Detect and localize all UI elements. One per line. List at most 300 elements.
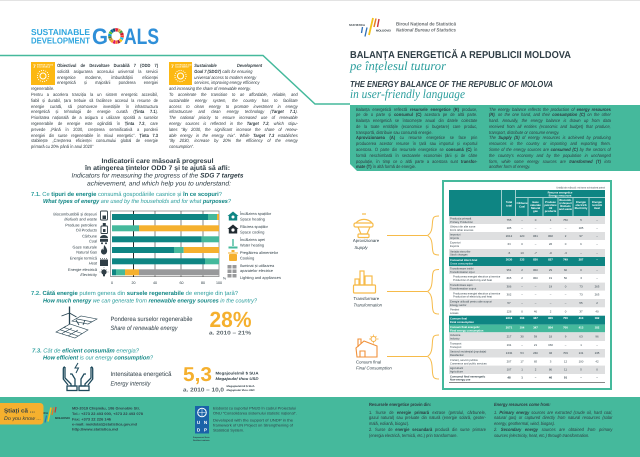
text block: SDG 7 English <box>169 63 298 149</box>
logo: UNDP: N <box>204 420 208 425</box>
chart row labels: Energie electrică <box>68 267 98 272</box>
table values: 1346 <box>506 351 513 355</box>
table values: 28 <box>549 242 552 246</box>
table values: 100 <box>579 360 584 364</box>
table row labels: Losses <box>450 312 459 315</box>
table values: 3 <box>580 276 582 280</box>
table row labels: Transport <box>450 342 462 346</box>
table values: 19 <box>549 284 552 288</box>
text block: SDG 7 English: “By 2030, increase by 20% the efficiency of the energy <box>169 138 298 143</box>
logo: UNDP: D <box>197 428 201 432</box>
chart row labels: Oil Products <box>76 228 97 232</box>
table header: Energy resources <box>549 195 572 198</box>
title: Romanian <box>349 49 571 73</box>
table values: 0 <box>565 284 567 288</box>
stat: renewable share: Ponderea surselor regenerabile <box>110 316 193 323</box>
bar: heat <box>112 258 219 264</box>
chart row labels: Electricity <box>80 272 98 277</box>
text block: energy balance English: the country's economy and by the population in unchanged <box>489 153 611 158</box>
legend: Lighting and appliances <box>240 275 281 280</box>
table values: 830 <box>533 258 538 262</box>
table header: Heat <box>594 207 600 210</box>
text block: energy balance English: Some of the energy sources are consumed (C) by the sectors of <box>489 147 611 152</box>
heading: question 7.3 <box>32 348 154 362</box>
table values: 265 <box>595 292 600 296</box>
heading: indicators: în atingerea țintelor ODD 7 și te ajută să afli: <box>84 165 230 172</box>
table values: 230 <box>533 351 538 355</box>
legend: Răcirea spațiilor <box>240 224 269 229</box>
chart row icons <box>100 211 108 276</box>
table values: – <box>550 226 552 230</box>
table values: 48 <box>507 376 511 380</box>
label: final consumption: Consum final <box>356 360 381 364</box>
title: English <box>350 79 553 101</box>
label: transformation: Transformation <box>354 302 383 308</box>
table values: 804 <box>548 326 553 330</box>
table values: 34 <box>507 242 511 246</box>
table header: naturale <box>530 204 541 207</box>
table values: – <box>596 234 598 238</box>
text block: energy balance English: (R), on the one hand, and their consumption (C) on the other <box>489 112 611 117</box>
label: supply: Aprovizionare <box>353 238 380 243</box>
icon: SDG 7 badge Romanian: 7 <box>33 64 36 70</box>
table values: 158 <box>548 343 553 347</box>
table values: – <box>550 301 552 305</box>
label: final consumption <box>356 360 392 370</box>
text block: SDG 7 Romanian: solicită asigurarea accesului universal la servicii <box>57 69 158 74</box>
table values: 42 <box>595 360 599 364</box>
table header: Biocomb. <box>559 199 572 202</box>
icon: supply tank <box>354 214 373 238</box>
table row labels: Exporturi <box>450 242 461 244</box>
label: transformation <box>354 296 383 308</box>
table values: 2 <box>521 268 523 272</box>
table values: 133 <box>520 258 525 262</box>
text block: SDG 7 English: infrastructure and clean energy technology (Target 7.1). <box>169 109 298 114</box>
text block: SDG 7 English: energy sources is reflected in the Target 7.2, which stipu- <box>169 121 298 126</box>
table header: Coal <box>519 206 525 208</box>
logo: UNDP: Empowered lives. <box>193 436 210 439</box>
table values: 700 <box>563 316 568 320</box>
support note: Statistical System. <box>213 428 244 432</box>
table values: 0 <box>535 218 537 222</box>
text block: energy source list Romanian: (energia electrică, termică, etc.) prin transformare. <box>369 433 458 438</box>
table row labels: Sectorul rezidențial (populație) <box>450 350 486 354</box>
stat: renewable share <box>110 307 252 336</box>
text block: SDG 7 English: The national priority to ensure increased use of renewable <box>169 115 298 120</box>
table row labels: Importuri <box>450 234 461 236</box>
text block: SDG 7 English: universal access to modern energy <box>194 75 256 80</box>
text block: energy balance Romanian: Aprovizionarea (A) cu resurse energetice se face prin <box>356 135 477 140</box>
legend: Încălzirea spațiilor <box>239 211 272 216</box>
table values: 755 <box>507 218 512 222</box>
table values: – <box>596 268 598 272</box>
text block: SDG 7 Romanian: fiabil și durabil, țara trebuie să faciliteze accesul la resurse de <box>31 98 158 103</box>
text block: SDG 7 English: services, improving energy efficiency <box>194 80 260 85</box>
text block: SDG 7 English: Sustainable Development <box>194 63 262 68</box>
support note: Developed with the support of UNDP in the <box>213 418 293 422</box>
logo: Statistica Moldovei header <box>349 18 391 36</box>
chart row labels: Gaze naturale <box>73 244 97 250</box>
heading: question 7.1: What types of energy are used by the households and for what purposes? <box>43 198 232 205</box>
stat: energy intensity: Energy intensity <box>110 380 151 388</box>
table values: 287 <box>579 258 584 262</box>
table values: – <box>535 376 537 380</box>
logo: Statistica Moldovei header: STATISTICA <box>349 23 365 27</box>
table row labels: Energy sector <box>450 304 467 307</box>
label: final consumption: Final Consumption <box>356 366 392 370</box>
heading: question 7.2: How much energy we can generate from renewable energy sources in the country? <box>43 298 258 304</box>
table values: 2 <box>565 234 567 238</box>
table header: Energie <box>592 201 602 204</box>
table row labels: Variația stocurilor <box>450 250 471 253</box>
logo: Statistica Moldovei footer <box>32 407 70 422</box>
title: Romanian: pe înțelesul tuturor <box>349 59 446 73</box>
legend: Încălzirea apei <box>239 237 265 242</box>
table values: 860 <box>533 276 538 280</box>
table values: 0 <box>596 368 598 372</box>
icon: heat radiator <box>100 258 108 266</box>
table values: 2 <box>521 276 523 280</box>
table values: 3 <box>550 360 552 364</box>
table values: 0 <box>565 310 567 314</box>
table row labels: Consumul intern brut <box>450 259 477 262</box>
panel: energy balance table: Unități de măsură: mii tone echivalent petrol <box>556 186 605 190</box>
table row labels: Non-energy use <box>450 379 471 382</box>
text block: SDG 7 English: and increasing the share of renewable energy. <box>169 86 251 91</box>
chart row labels: Natural Gas <box>76 250 97 254</box>
icon: wind turbine and solar panels <box>56 306 97 338</box>
table row labels: Final consumption <box>450 321 474 324</box>
table values: – <box>535 284 537 288</box>
stat: energy intensity: 5,3 <box>183 364 212 386</box>
table row labels: Consum final energetic <box>450 326 480 329</box>
icon: SDG 7 badge English: CLEAN ENERGY <box>175 66 190 69</box>
text block: energy balance Romanian: producerea acestor resurse în țară sau importul și exportul <box>356 141 477 146</box>
bar: electricity <box>112 269 219 275</box>
chart row labels <box>53 212 98 277</box>
axis labels <box>111 276 227 285</box>
text block: SDG 7 English: To accelerate the transition to an affordable, reliable, and <box>169 92 298 97</box>
table header: Natural <box>531 207 540 210</box>
table values <box>506 218 600 380</box>
text block: energy source list Romanian: 1. Surse de energie primară extrase (petrolul, cărbunele, <box>369 410 486 415</box>
connector: transformation <box>387 270 439 314</box>
icon: transformation plant <box>354 271 376 293</box>
table values: 91 <box>564 376 567 380</box>
table header: electrică <box>576 204 587 207</box>
icon: SDG 7 badge Romanian: ENERGIE CURATĂ <box>37 64 54 66</box>
legend: Pregătirea alimentelor <box>240 250 279 255</box>
chart row labels: Energie termică <box>70 256 98 260</box>
legend: Cooking <box>240 256 254 260</box>
heading: indicators: Indicators for measuring the progress of the SDG 7 targets <box>72 172 244 180</box>
table values: – <box>535 301 537 305</box>
logo: Sustainable Development Goals: ALS <box>124 24 159 49</box>
contact block: Fax: +373 22 226 146 <box>72 418 111 422</box>
table values: 868 <box>548 234 553 238</box>
table values: 13 <box>520 251 524 255</box>
table values: – <box>565 226 567 230</box>
text block: SDG 7 English: consumption”. <box>169 144 194 149</box>
table values: 59 <box>534 334 537 338</box>
stat: energy intensity: Megajoule/mil $ SUA <box>226 385 255 388</box>
text block: SDG 7 Romanian: stabilește „Creșterea eficienței consumului global de energie <box>31 138 158 143</box>
panel: energy balance table <box>443 181 611 389</box>
text block: SDG 7 Romanian: regenerabile. <box>31 86 54 91</box>
table values: 306 <box>507 284 512 288</box>
heading: indicators: achievement, and which help you to understand: <box>87 180 231 188</box>
table row labels: Transformation input <box>450 271 475 274</box>
table values: 837 <box>548 258 553 262</box>
callout: do you know badge: Do you know ... <box>4 416 41 422</box>
text block: energy balance Romanian <box>356 106 478 169</box>
table values: 207 <box>507 360 512 364</box>
table header: Gaze <box>532 201 539 204</box>
icon: SDG 7 badge Romanian <box>31 62 55 85</box>
table values: 29 <box>549 268 552 272</box>
table row labels: Primary Production <box>450 221 473 224</box>
heading: question 7.3: 7.3. Cât de eficient consumăm energia? <box>32 348 140 354</box>
stat: energy intensity: Megajoule/ thou USD <box>216 376 259 381</box>
table values: 809 <box>548 316 553 320</box>
organisation name: National Bureau of Statistics <box>396 28 456 34</box>
table header: și deșeuri <box>559 202 572 205</box>
stat: renewable share: 28% <box>210 307 252 332</box>
table values: 21 <box>534 343 537 347</box>
icon: hands with energy bolt <box>63 363 93 390</box>
table values: 347 <box>533 316 538 320</box>
table values: 0 <box>580 268 582 272</box>
table row labels: Exports <box>450 245 460 248</box>
contact block: Tel.: +373 22 403 000, +373 22 403 078 <box>72 412 143 416</box>
table values: 128 <box>507 310 512 314</box>
table values: 2071 <box>506 326 513 330</box>
stat: energy intensity: a. 2010 – 10,0 <box>183 388 224 394</box>
support note: framework of UN Project on Strengthening of <box>213 424 294 428</box>
table values: 749 <box>563 258 568 262</box>
axis labels: 80 <box>201 281 205 285</box>
table values: 6 <box>580 242 582 246</box>
text block: energy balance English: resources in the country or importing and exporting them. <box>489 141 611 146</box>
text block: SDG 7 Romanian: energetice moderne, îmbunătățirii eficienței <box>57 75 158 80</box>
heading: question 7.1 <box>31 191 232 205</box>
table header: Biofuels <box>560 205 571 208</box>
axis labels: 0 <box>111 281 113 285</box>
table row labels: Imports <box>450 237 460 240</box>
table header: Energie <box>576 201 586 204</box>
chart row labels: Biocombustibili și deșeuri <box>53 212 97 216</box>
table values: 185 <box>579 226 584 230</box>
heading: question 7.3: How efficient is our energy consumption? <box>43 354 154 362</box>
table values: 120 <box>520 234 525 238</box>
logo: Sustainable Development Goals: DEVELOPMENT <box>31 36 91 46</box>
text block: energy balance Romanian: mate (T) în altă formă de energie. <box>356 164 415 169</box>
bar: biofuels <box>112 214 219 220</box>
table header <box>449 190 605 216</box>
icon: final consumption house with sun <box>356 334 378 357</box>
table values: 182 <box>595 326 600 330</box>
chart row labels: Heat <box>89 260 98 266</box>
table values: 86 <box>549 368 552 372</box>
logo: UNDP: P <box>204 428 207 432</box>
table row labels: Commerce and public services <box>450 362 487 365</box>
table values: 12 <box>564 360 567 364</box>
icon: coal cart <box>100 235 108 244</box>
text block: SDG 7 Romanian: primară cu 20% până în anul 2020” <box>31 144 93 149</box>
table values: 709 <box>563 351 568 355</box>
table values: 2 <box>596 301 598 305</box>
chart row labels: Produse petroliere <box>65 222 97 228</box>
table values: – <box>580 376 582 380</box>
text block: energy balance English: another form of energy. <box>489 164 530 169</box>
table values: 1 <box>550 218 552 222</box>
support note: ONU "Consolidarea sistemului statistic național". <box>213 412 297 416</box>
table row labels: Agriculture <box>450 370 463 373</box>
icon: oil bottle <box>101 223 108 234</box>
table values: 104 <box>520 326 525 330</box>
table header: termică <box>592 204 602 207</box>
text block: energy balance Romanian: formă neschimbată în sectoarele economiei țării și de către <box>356 153 477 158</box>
title: English: THE ENERGY BALANCE OF THE REPUBLIC OF MOLOVA <box>350 79 553 89</box>
table values: – <box>521 292 523 296</box>
table row labels: Consum final <box>450 318 467 320</box>
table row labels: Transformare ieșiri <box>450 284 473 287</box>
table values: 347 <box>533 326 538 330</box>
text block: energy source list English: sources (electricity, heat, etc.) through transformation. <box>494 433 589 438</box>
bar: oil products <box>112 225 219 231</box>
text block: energy balance English <box>489 106 611 169</box>
table values: -7 <box>534 251 537 255</box>
logo: Statistica Moldovei header: MOLDOVEI <box>376 28 391 32</box>
table header: and waste <box>559 208 572 211</box>
logo: UNDP <box>193 406 210 442</box>
table values: 951 <box>507 268 512 272</box>
table values: – <box>521 301 523 305</box>
text block: energy balance English: The Supply (S) of energy resources is achieved by producing <box>489 135 611 140</box>
bar: natural gas <box>112 247 219 253</box>
table values: – <box>521 284 523 288</box>
table values: 860 <box>533 268 538 272</box>
icon: SDG 7 badge English <box>169 62 192 85</box>
text block: energy balance English: hand. Annually, the energy balance is drawn up from data <box>489 118 611 123</box>
bar: coal <box>112 236 219 242</box>
text block: SDG 7 English: lates “By 2030, the significant increase the share of renew- <box>169 127 298 132</box>
text block: SDG 7 Romanian <box>31 63 158 149</box>
table values: 40 <box>595 310 599 314</box>
text block: SDG 7 Romanian: Pentru a accelera tranziția la un sistem energetic accesibil, <box>31 92 158 97</box>
table values: 37 <box>579 310 583 314</box>
table values: – <box>550 292 552 296</box>
table row labels: Final energy consumption <box>450 329 484 332</box>
table values: 65 <box>534 360 537 364</box>
text block: energy sources English: Energy resources come from: <box>494 402 551 407</box>
panel: footer band <box>0 397 640 457</box>
table row labels: Energie utilizată pentru alte scopuri <box>450 300 492 304</box>
table row labels: Industrie <box>450 334 461 337</box>
table row labels: Producția primară <box>450 218 472 220</box>
table values: 0 <box>521 242 523 246</box>
text block: energy sources Romanian: Resursele energetice provin din: <box>369 402 431 407</box>
stat: energy intensity: Megajoule/ thou USD <box>226 389 255 392</box>
icon: biofuel canister <box>100 211 108 220</box>
text block: energy source list English: 1. Primary energy sources are extracted (crude oil, hard coal, <box>494 410 612 415</box>
table values: 96 <box>595 334 599 338</box>
icon: light bulb <box>100 267 108 276</box>
logo: UNDP: U <box>197 420 201 425</box>
table header: Oil <box>549 207 553 210</box>
table values: 141 <box>579 351 584 355</box>
table values: 3030 <box>506 258 513 262</box>
text block: SDG 7 Romanian: energetică și tehnologii de energie curată (Ținta 7.1). <box>31 109 158 114</box>
table values: 54 <box>520 351 524 355</box>
table values: 413 <box>579 326 584 330</box>
axis labels: % <box>223 276 227 280</box>
contact block <box>72 406 143 432</box>
legend: aparatelor electrice <box>240 268 273 273</box>
table values: 1 <box>580 343 582 347</box>
table values: – <box>535 242 537 246</box>
table row labels: Gross consumption <box>450 262 474 265</box>
table values: – <box>521 343 523 347</box>
heading: indicators <box>72 158 244 188</box>
table values: 865 <box>507 276 512 280</box>
table values: 5 <box>580 218 582 222</box>
table values: 135 <box>595 351 600 355</box>
icon: cooking pot <box>228 250 238 261</box>
table row labels: Consumul final neenergetic <box>450 375 486 378</box>
chart row labels: Cărbune <box>82 234 97 238</box>
logo: Sustainable Development Goals: G <box>92 24 108 49</box>
axis labels: 100 <box>216 281 222 285</box>
table values: 2 <box>535 368 537 372</box>
text block: energy source list English: energy, geothermal, wind, biogas). <box>494 421 555 426</box>
text block: SDG 7 Romanian: regenerabile de energie este oglindită în Ținta 7.2, care <box>31 121 158 126</box>
legend: Water heating <box>240 242 264 248</box>
table values: – <box>596 258 598 262</box>
table header: total <box>506 204 512 208</box>
legend: Space cooling <box>240 230 264 234</box>
table values: 2012 <box>506 234 513 238</box>
table row labels: Industry <box>450 337 460 340</box>
table values: 63 <box>579 334 583 338</box>
table values: – <box>580 251 582 255</box>
table values: – <box>521 218 523 222</box>
contact block: e-mail: moldstat@statistica.gov.md <box>72 422 137 426</box>
text block: energy balance English: form, while some energy sources are transformed (T) into <box>489 159 611 164</box>
text block: SDG 7 Romanian: energetică și majorării ponderea energiei <box>57 80 158 85</box>
table values: – <box>596 251 598 255</box>
table row labels: Production of electricity and heat <box>453 296 492 299</box>
text block: energy balance Romanian: pe de o parte și consumul (C) acestora pe de altă parte. <box>356 112 477 117</box>
text block: SDG 7 Romanian: energie curată, să promoveze investițiile în infrastructura <box>31 104 158 109</box>
table values: 5 <box>580 368 582 372</box>
table values: 191 <box>507 343 512 347</box>
text block: energy source list Romanian: gazul natural) sau preluate din natură (energie solară, geoter- <box>369 415 486 420</box>
callout: do you know badge <box>0 403 44 424</box>
table values: 265 <box>595 284 600 288</box>
table values: 413 <box>579 316 584 320</box>
icon: SDG 7 badge English: 7 <box>171 64 174 70</box>
stat: energy intensity <box>110 364 259 394</box>
label: transformation: Transformare <box>354 296 380 301</box>
logo: Sustainable Development Goals: SUSTAINABLE <box>31 27 90 37</box>
table values: 17 <box>520 360 524 364</box>
stat: renewable share: a. 2010 – 21% <box>209 330 251 336</box>
table values: – <box>565 301 567 305</box>
axis labels: 40 <box>153 281 157 285</box>
table values: – <box>596 276 598 280</box>
